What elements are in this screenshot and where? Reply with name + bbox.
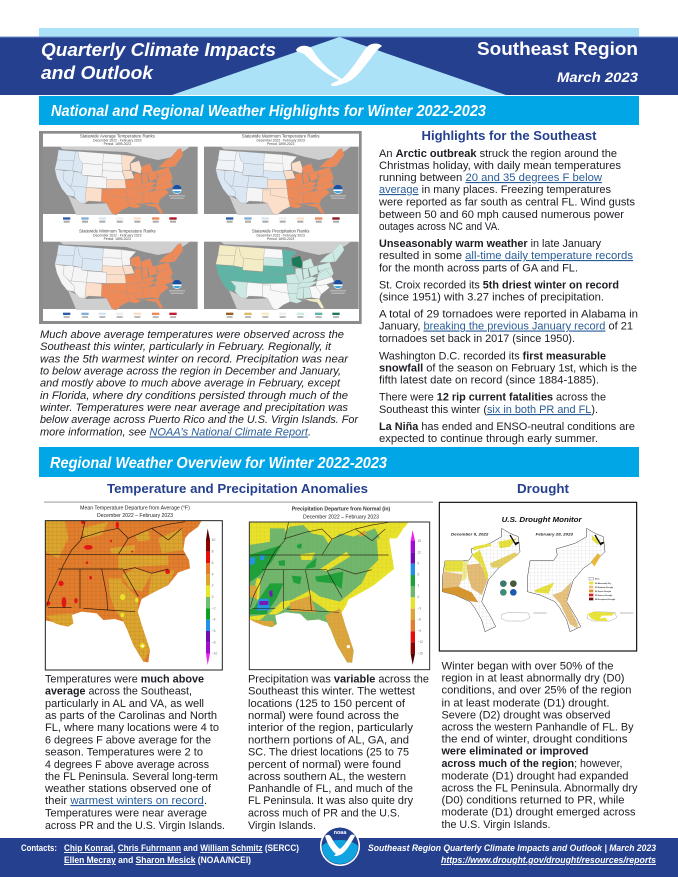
text block: southeast highlights: A total of 29 tornadoes were reported in Alabama in: [379, 308, 638, 320]
text block: precipitation: locations (125 to 150 percent of: [248, 698, 406, 710]
text block: temperature: weather stations observed one of: [44, 783, 212, 795]
text block: southeast highlights: [378, 148, 638, 445]
text block: national summary: winter. Temperatures were near average and precipitation was: [40, 402, 348, 414]
text block: temperature: Temperatures were near average: [45, 808, 207, 820]
text block: national summary: more information, see NOAA's National Climate Report.: [40, 426, 311, 438]
map titles: Period: 1895-2023: [104, 237, 131, 241]
map titles: Statewide Precipitation Ranks: [252, 229, 309, 234]
text block: southeast highlights: There were 12 rip current fatalities across the: [379, 392, 606, 404]
text block: drought: across the western Panhandle of FL. By: [442, 722, 634, 734]
color scale: temperature: 10: [212, 538, 216, 542]
chart: U.S. Drought Monitor: December 6, 2022: [451, 532, 489, 537]
text block: national summary: was the 5th warmest winter on record. Precipitation was near: [40, 354, 349, 366]
heading: drought: Drought: [517, 481, 570, 496]
text block: drought: region in at least abnormally dry (D0): [442, 672, 625, 684]
text block: temperature: average across the Southeast,: [45, 686, 192, 698]
text block: southeast highlights: for the month across parts of GA and FL.: [379, 262, 578, 274]
color scale: temperature: −8: [212, 640, 216, 644]
text block: southeast highlights: La Niña has ended and ENSO-neutral conditions are: [379, 421, 635, 433]
text block: drought: the end of winter, drought conditions: [442, 734, 628, 746]
legends for rank maps: [63, 217, 340, 318]
text block: southeast highlights: January, breaking the previous January record of 21: [379, 320, 633, 332]
text block: temperature: the FL Peninsula. Several long-term: [45, 771, 218, 783]
color scale: temperature: 2: [212, 584, 214, 588]
chart: temperature departure map: December 2022 – February 2023: [97, 513, 173, 519]
text block: southeast highlights: St. Croix recorded its 5th driest winter on record: [379, 280, 619, 292]
title: Quarterly Climate Impacts: [41, 39, 276, 60]
map: drought February 28: [527, 528, 605, 632]
text block: southeast highlights: average in many places. Freezing temperatures: [379, 184, 611, 196]
drought legend: D3 Extreme Drought: [595, 594, 613, 597]
footer publication info: https://www.drought.gov/drought/resources/reports: [441, 855, 656, 866]
text block: southeast highlights: Washington D.C. recorded its first measurable: [379, 350, 606, 362]
text block: drought: Severe (D2) drought was observed: [442, 710, 610, 722]
text block: drought: the U.S. Virgin Islands.: [442, 819, 550, 831]
text block: precipitation: Panhandle of FL, and much of the: [248, 783, 413, 795]
icon: white bird logo: [296, 44, 382, 86]
text block: southeast highlights: Unseasonably warm weather in late January: [379, 238, 601, 250]
color scale: temperature: 0: [212, 595, 214, 599]
text block: national summary: Southeast this winter, particularly in February. Regionally, it: [40, 341, 332, 353]
text block: temperature: season. Temperatures were 2 to: [45, 746, 203, 758]
region and date: [477, 39, 638, 85]
text block: southeast highlights: (since 1951) with 3.27 inches of precipitation.: [379, 292, 604, 304]
color scale: precipitation: [411, 530, 423, 665]
drought legend: D0 Abnormally Dry: [595, 582, 611, 585]
color scale: precipitation: −3: [417, 606, 421, 610]
map: drought December 6: [442, 528, 520, 632]
color scale: precipitation: 15: [417, 539, 421, 543]
drought legend: [589, 577, 616, 601]
text block: precipitation: Virgin Islands.: [248, 820, 316, 832]
map titles: Statewide Minimum Temperature Ranks: [79, 229, 156, 234]
heading: anomalies: Temperature and Precipitation Anomalies: [107, 481, 368, 496]
panel: four national rank maps: [39, 131, 362, 324]
map: statewide minimum temperature ranks: [43, 242, 198, 310]
drought legend: D1 Moderate Drought: [595, 586, 614, 589]
color scale: precipitation: 12: [417, 550, 421, 554]
color scale: temperature: 8: [212, 550, 214, 554]
text block: national summary: Much above average temperatures were observed across the: [40, 329, 344, 341]
text block: drought: moderate (D1) drought emerged across: [442, 806, 636, 818]
text block: southeast highlights: outages across NC and VA.: [379, 221, 500, 233]
color scale: precipitation: −12: [417, 640, 423, 644]
text block: southeast highlights: expected to continue through early summer.: [379, 433, 598, 445]
text block: national summary: [40, 329, 359, 438]
map titles: Statewide Maximum Temperature Ranks: [242, 133, 320, 138]
text block: southeast highlights: Southeast this winter (six in both PR and FL).: [379, 404, 598, 416]
icon: NOAA logo: noaa: [334, 830, 347, 836]
heading: highlights for the southeast: Highlights for the Southeast: [422, 128, 597, 143]
map titles: [79, 133, 320, 241]
text block: temperature: their warmest winters on record.: [45, 795, 207, 807]
map titles: Statewide Average Temperature Ranks: [80, 133, 155, 138]
text block: drought: in at least moderate (D1) drought.: [442, 698, 610, 710]
map titles: December 2022 - February 2023: [257, 234, 305, 238]
chart: precipitation departure map: December 2022 – February 2023: [303, 514, 379, 520]
text block: precipitation: [248, 674, 429, 832]
drought legend: D4 Exceptional Drought: [595, 598, 616, 601]
text block: southeast highlights: Christmas holiday, with daily mean temperatures: [379, 160, 621, 172]
chart: temperature departure map: Mean Temperature Departure from Average (°F): [80, 505, 190, 511]
map titles: Period: 1895-2023: [104, 142, 131, 146]
text block: national summary: to below average across the region in December and January,: [40, 366, 341, 378]
chart: precipitation departure map: [239, 507, 430, 670]
footer contacts: Contacts:: [21, 843, 57, 854]
text block: southeast highlights: resulted in some all-time daily temperature records: [379, 250, 633, 262]
text block: precipitation: SC. The driest locations (25 to 75: [248, 746, 409, 758]
chart: U.S. Drought Monitor: U.S. Drought Monitor: [502, 515, 583, 524]
text block: drought: moderate (D1) drought had expanded: [442, 770, 628, 782]
footer band: [0, 838, 678, 877]
text block: drought: (D0) conditions returned to PR, while: [442, 794, 624, 806]
text block: drought: across the FL Peninsula. Abnormally dry: [442, 782, 638, 794]
text block: precipitation: across much of PR and the U.S.: [248, 808, 400, 820]
color scale: precipitation: −9: [417, 629, 421, 633]
color scale: temperature: [206, 528, 217, 665]
map titles: December 2022 - February 2023: [257, 139, 305, 143]
map titles: December 2022 - February 2023: [93, 234, 142, 238]
color scale: precipitation: 6: [417, 573, 419, 577]
color scale: precipitation: 0: [417, 595, 419, 599]
text block: precipitation: FL Peninsula. It was also quite dry: [248, 795, 413, 807]
text block: southeast highlights: were reported as far south as central FL. Wind gusts: [378, 196, 635, 208]
section heading: regional overview: [39, 447, 639, 477]
map titles: Period: 1895-2023: [267, 237, 295, 241]
color scale: precipitation: 9: [417, 561, 419, 565]
text block: precipitation: normal) were found across the: [248, 710, 399, 722]
text block: temperature: as parts of the Carolinas and North: [45, 710, 217, 722]
footer publication info: [368, 843, 657, 866]
text block: southeast highlights: running between 20 and 35 degrees F below: [379, 172, 603, 184]
text block: southeast highlights: snowfall of the season on February 1st, which is the: [379, 362, 637, 374]
chart: U.S. Drought Monitor: February 28, 2023: [536, 532, 574, 537]
map: statewide average temperature ranks: [43, 147, 198, 215]
text block: precipitation: Southeast this winter. The wettest: [248, 686, 416, 698]
color scale: temperature: −2: [212, 606, 216, 610]
text block: drought: [441, 660, 638, 831]
text block: national summary: in Florida, where dry conditions persisted through much of the: [40, 390, 348, 402]
text block: national summary: and mostly above to much above average in February, except: [40, 378, 341, 390]
color scale: precipitation: 3: [417, 584, 419, 588]
text block: temperature: particularly in AL and VA, as well: [45, 698, 204, 710]
text block: national summary: below average across Puerto Rico and the U.S. Virgin Islands. For: [40, 414, 359, 426]
text block: drought: conditions, and over 25% of the region: [442, 684, 632, 696]
chart: precipitation departure map: Precipitation Departure from Normal (in): [292, 507, 391, 513]
color scale: temperature: 4: [212, 572, 214, 576]
chart: U.S. Drought Monitor: [439, 502, 637, 651]
section heading: highlights: National and Regional Weather Highlights for Winter 2022-2023: [51, 103, 486, 120]
text block: precipitation: across southern AL, the western: [248, 771, 406, 783]
text block: temperature: 4 degrees F above average across: [45, 759, 209, 771]
text block: southeast highlights: fifth latest date on record (since 1884-1885).: [379, 374, 599, 386]
text block: southeast highlights: tornadoes set back in 2017 (since 1950).: [379, 333, 575, 345]
text block: drought: Winter began with over 50% of the: [442, 660, 614, 672]
footer contacts: Chip Konrad, Chris Fuhrmann and William Schmitz (SERCC): [64, 843, 299, 854]
footer contacts: Ellen Mecray and Sharon Mesick (NOAA/NCEI): [64, 855, 251, 866]
text block: precipitation: Precipitation was variable across the: [248, 674, 429, 686]
text block: precipitation: percent of normal) were found: [248, 759, 401, 771]
region and date: March 2023: [557, 69, 638, 85]
drought legend: D2 Severe Drought: [595, 590, 611, 593]
icon: NOAA logo: [320, 826, 360, 866]
text block: precipitation: northern portions of AL, GA, and: [248, 734, 409, 746]
color scale: temperature: 6: [212, 561, 214, 565]
text block: drought: were eliminated or improved: [441, 746, 589, 758]
text block: drought: across much of the region; however,: [442, 758, 622, 770]
region and date: Southeast Region: [477, 39, 638, 59]
text block: temperature: Temperatures were much above: [45, 674, 204, 686]
text block: temperature: FL, where many locations were 4 to: [45, 722, 219, 734]
text block: southeast highlights: between 50 and 60 mph caused numerous power: [379, 209, 624, 221]
text block: southeast highlights: An Arctic outbreak struck the region around the: [379, 148, 617, 160]
footer contacts: [21, 843, 299, 866]
map titles: Period: 1895-2023: [267, 142, 295, 146]
color scale: temperature: −10: [212, 652, 217, 656]
color scale: temperature: −6: [212, 629, 216, 633]
Puerto Rico insets: [501, 612, 633, 621]
drought legend: None: [595, 579, 599, 581]
text block: temperature: 6 degrees F above average for the: [45, 734, 211, 746]
section heading: regional overview: Regional Weather Overview for Winter 2022-2023: [50, 455, 387, 472]
title: and Outlook: [41, 62, 155, 83]
color scale: precipitation: −6: [417, 618, 421, 622]
color scale: precipitation: −15: [417, 651, 423, 655]
text block: temperature: [44, 674, 225, 832]
text block: temperature: across PR and the U.S. Virgin Islands.: [45, 820, 225, 832]
color scale: temperature: −4: [212, 618, 216, 622]
chart: temperature departure map: [35, 505, 223, 670]
agency logos: [500, 580, 517, 596]
map: statewide precipitation ranks: [204, 242, 359, 310]
map: statewide maximum temperature ranks: [204, 147, 359, 215]
text block: precipitation: interior of the region, particularly: [248, 722, 413, 734]
title: [41, 39, 276, 83]
section heading: highlights: [39, 96, 639, 125]
header band: [0, 28, 678, 95]
map titles: December 2022 - February 2023: [93, 139, 142, 143]
